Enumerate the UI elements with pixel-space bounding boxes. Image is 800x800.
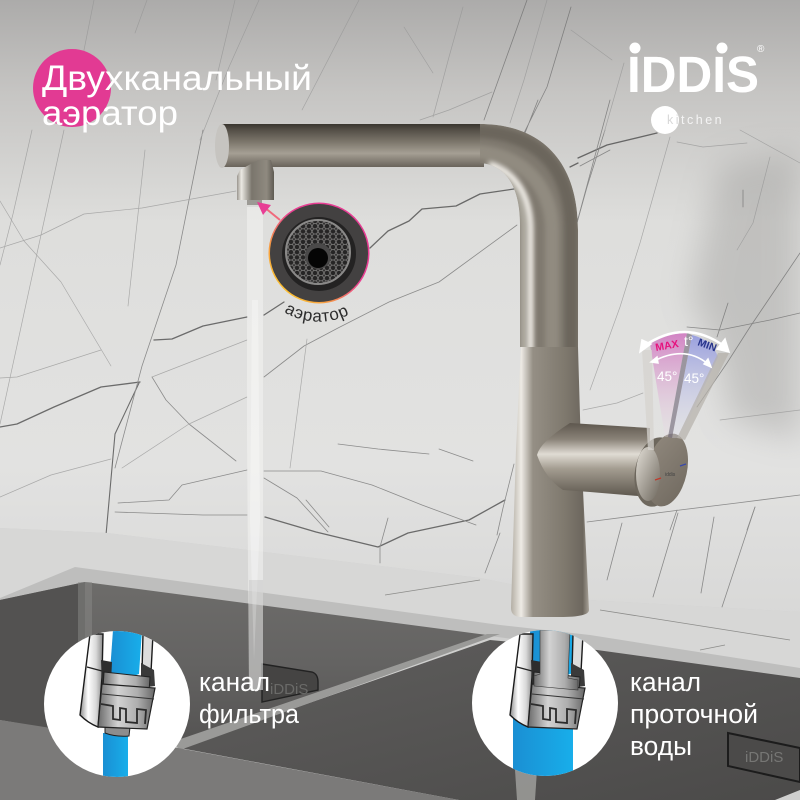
label MAX: MAX <box>654 338 680 354</box>
callout arrow <box>257 202 280 220</box>
aerator nozzle <box>237 160 274 205</box>
handle end cap: iddis <box>665 472 676 478</box>
label t: t° <box>684 333 694 349</box>
faucet spout <box>222 124 484 167</box>
faucet body <box>511 347 589 617</box>
blue flow water upper <box>530 630 581 674</box>
title: Двухканальный <box>42 59 312 98</box>
title badge <box>33 49 322 133</box>
marble veins <box>0 0 800 607</box>
fan arrows <box>640 332 729 367</box>
label: flow channel: воды <box>630 731 692 761</box>
drain plate: left sink <box>262 664 318 702</box>
angle max: 45° <box>657 369 677 384</box>
fan sector: max <box>650 333 687 437</box>
label: flow channel <box>630 667 758 761</box>
inset: filter channel <box>44 630 190 780</box>
drain plate: left sink: iDDiS <box>270 681 308 698</box>
logo <box>627 42 765 134</box>
faucet <box>215 124 694 617</box>
sink divider rim <box>172 634 500 750</box>
label: flow channel: проточной <box>630 699 758 729</box>
spout end cap <box>215 124 229 168</box>
lower counter reflection <box>0 720 459 800</box>
label: flow channel: канал <box>630 667 701 697</box>
drain plate: right sink: iDDiS <box>745 749 783 766</box>
water stream <box>247 207 537 800</box>
logo sub-brand: kitchen <box>667 113 724 127</box>
angle min: 45° <box>684 371 704 386</box>
drain plate: right sink <box>728 733 800 782</box>
blue filtered water upper <box>110 630 142 677</box>
faucet bend and upper tube <box>474 124 578 352</box>
logo wordmark: IDDIS <box>627 46 759 103</box>
logo: ® <box>757 44 765 55</box>
fan sector: min <box>672 335 718 438</box>
label: filter channel: фильтра <box>199 699 300 729</box>
handle lever <box>537 423 650 497</box>
label: aerator: аэратор <box>285 306 348 324</box>
aerator callout <box>257 202 370 324</box>
label: filter channel: канал <box>199 667 270 697</box>
blue filtered water lower <box>103 733 128 780</box>
countertop <box>0 528 800 800</box>
temperature fan diagram <box>640 332 729 450</box>
aerator disc <box>268 202 370 304</box>
title: аэратор <box>42 94 178 133</box>
left sink basin <box>0 582 487 745</box>
label MIN: MIN <box>696 337 718 354</box>
right sink basin <box>180 640 800 800</box>
blue flow water lower <box>513 718 573 776</box>
handle end cap <box>629 430 694 510</box>
inner tube <box>534 630 578 690</box>
label: filter channel <box>199 667 300 729</box>
inset: flow water channel <box>472 630 618 780</box>
background: marble wall <box>0 0 800 620</box>
